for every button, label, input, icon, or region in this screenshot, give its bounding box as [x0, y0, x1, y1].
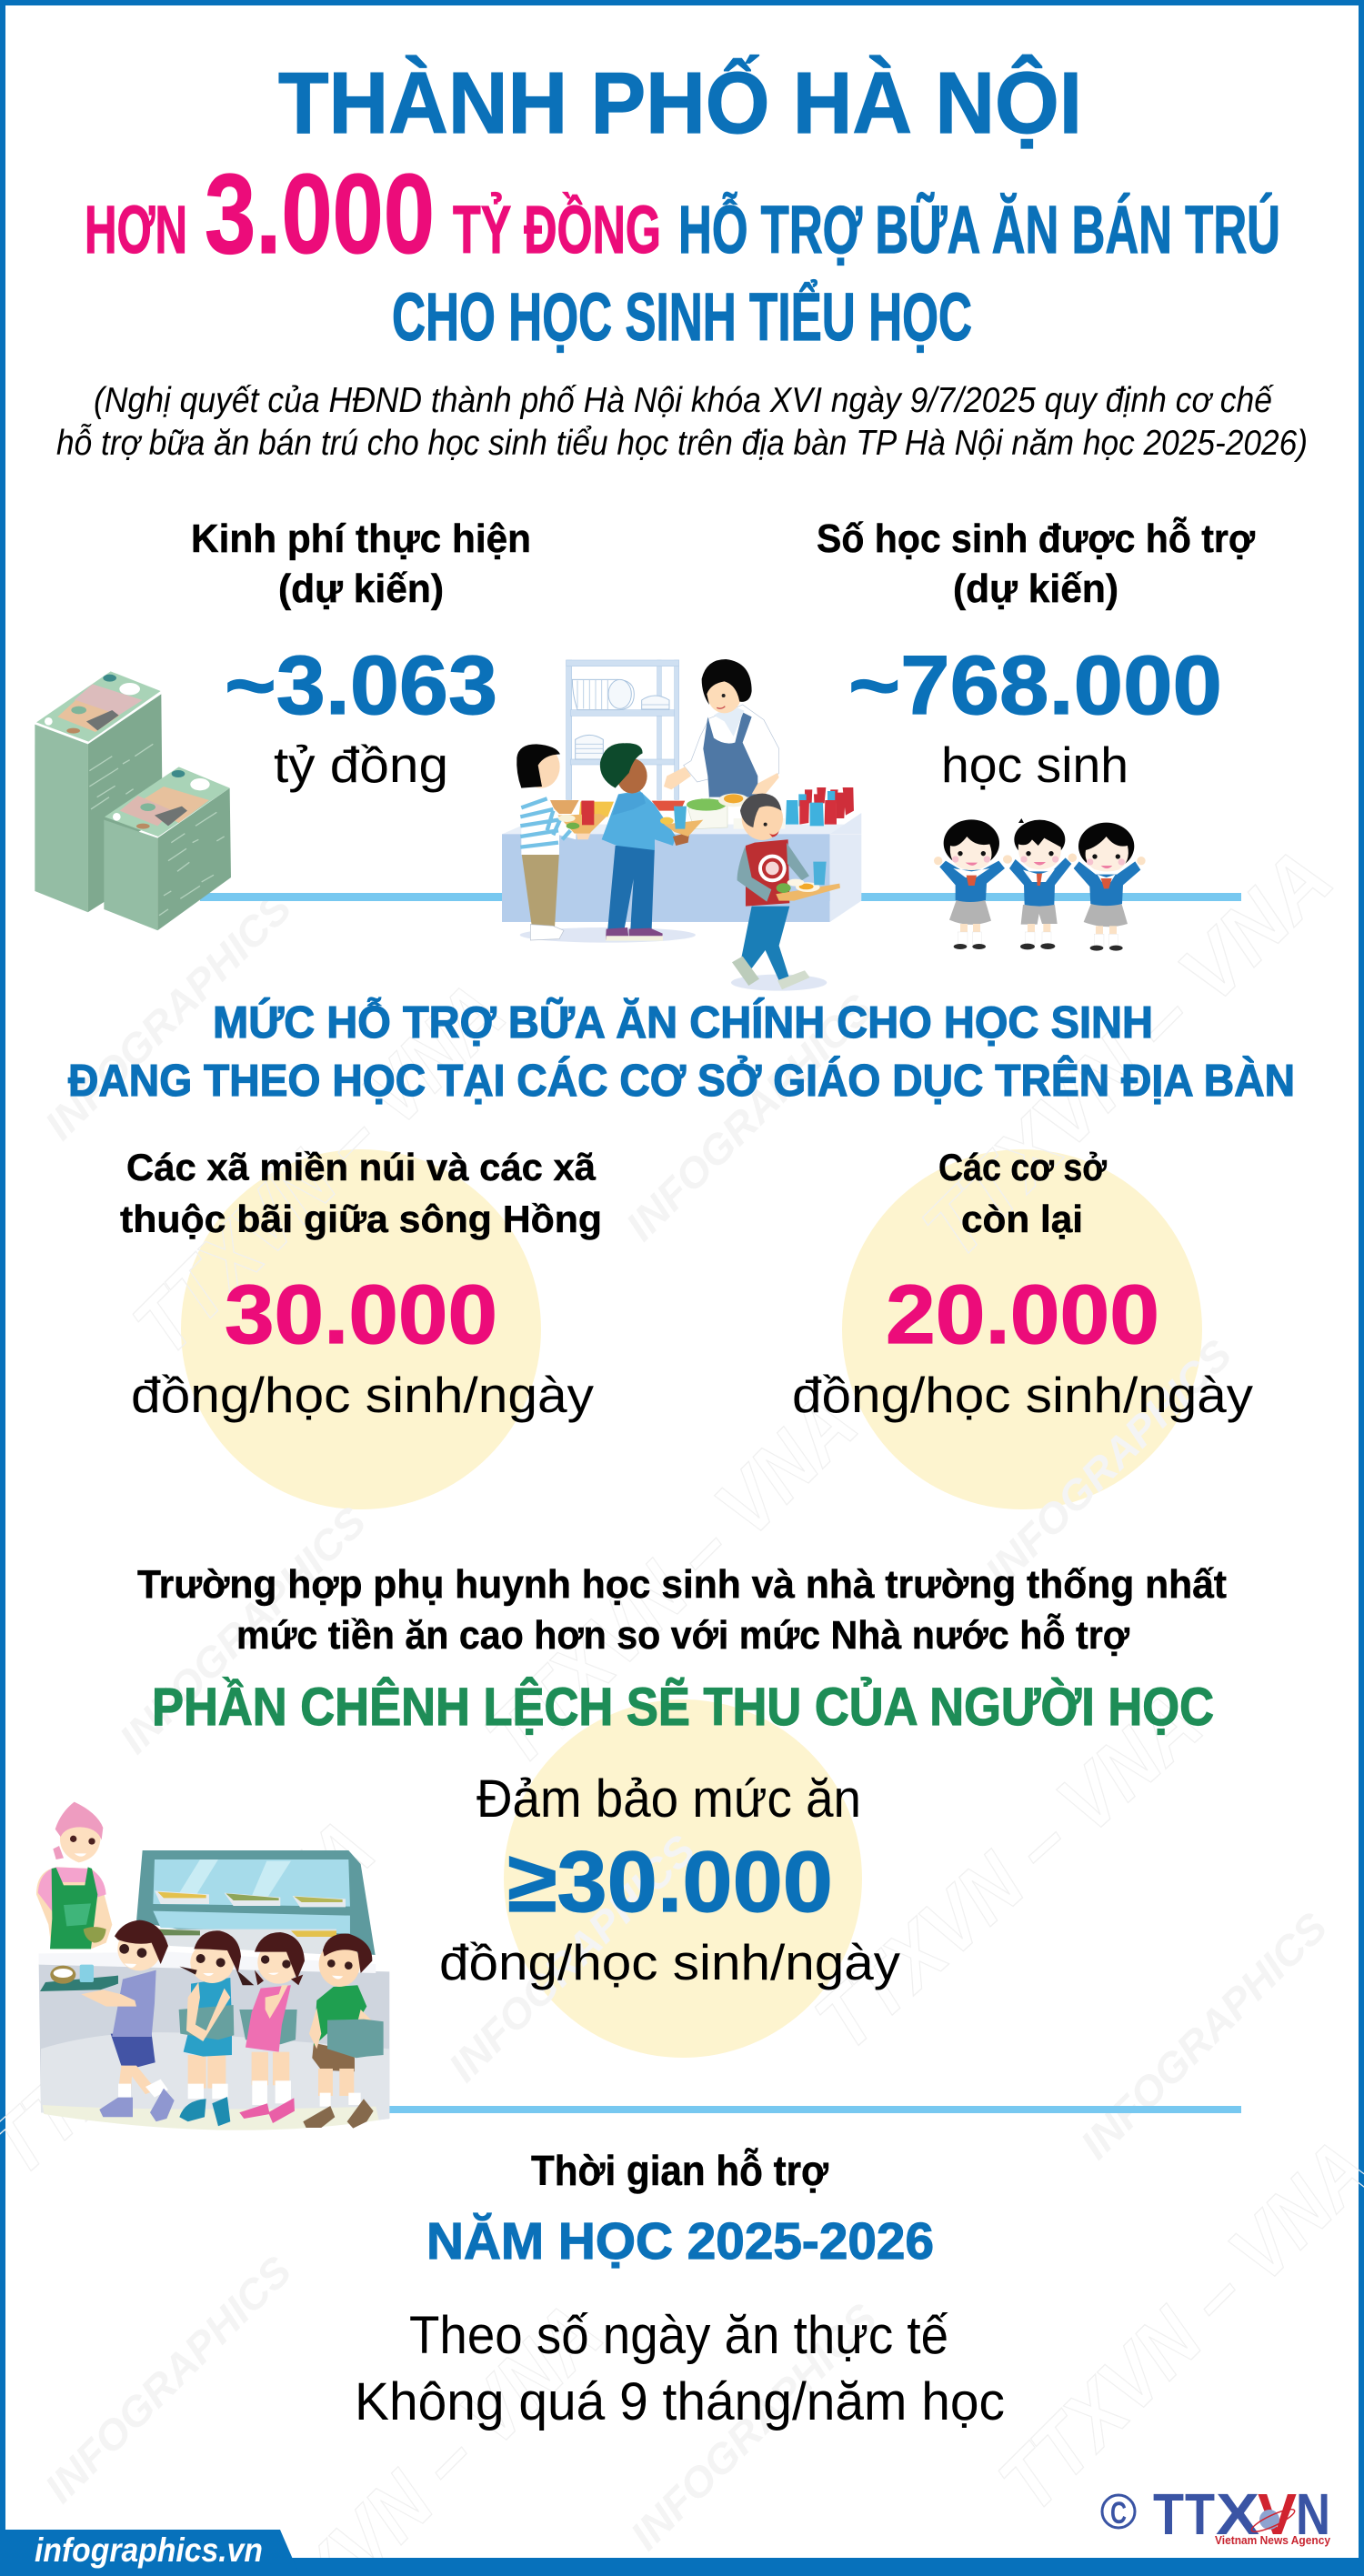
- child in pink: [239, 1932, 305, 2123]
- watermarks: TTXVN – VNA: [798, 1677, 1219, 2068]
- watermarks: INFOGRAPHICS: [1071, 1903, 1337, 2168]
- pupil 1: [934, 819, 1011, 949]
- logo: TTXVN Vietnam News Agency: V: [1258, 2481, 1297, 2547]
- support rate: mountain communes: 30.000: [225, 1268, 497, 1361]
- stat: students: [817, 516, 1256, 793]
- headline line 1: [85, 152, 1280, 277]
- text block: parents agreement: mức tiền ăn cao hơn so với mức Nhà nước hỗ trợ: [236, 1612, 1130, 1658]
- copyright mark: [1102, 2495, 1135, 2531]
- footer tag: site name: [0, 2530, 300, 2576]
- shadows: [520, 927, 827, 991]
- stat: budget: Kinh phí thực hiện: [191, 516, 531, 561]
- support rate: other schools: đồng/học sinh/ngày: [792, 1367, 1254, 1423]
- subtitle note: [56, 381, 1308, 463]
- logo: TTXVN Vietnam News Agency: T: [1185, 2481, 1215, 2547]
- subtitle note: (Nghị quyết của HĐND thành phố Hà Nội khóa XVI ngày 9/7/2025 quy định cơ chế: [94, 381, 1274, 420]
- title: city: THÀNH PHỐ HÀ NỘI: [278, 54, 1082, 152]
- watermarks: INFOGRAPHICS: [35, 884, 301, 1148]
- pupil 3: [1068, 823, 1146, 951]
- stat: students: (dự kiến): [953, 566, 1118, 611]
- divider line: upper: [200, 893, 1241, 901]
- headline line 2: CHO HỌC SINH TIỂU HỌC: [392, 279, 972, 355]
- support rate: mountain communes: thuộc bãi giữa sông Hồng: [120, 1198, 602, 1240]
- child in purple: [81, 1920, 175, 2121]
- green callout heading: PHẦN CHÊNH LỆCH SẼ THU CỦA NGƯỜI HỌC: [152, 1678, 1214, 1737]
- support period: Theo số ngày ăn thực tế: [409, 2306, 948, 2365]
- watermarks: TTXVN – VNA: [116, 967, 523, 1373]
- watermarks: INFOGRAPHICS: [976, 1330, 1241, 1595]
- cups: [786, 787, 854, 826]
- child in blue dress: [179, 1930, 254, 2126]
- circles: yellow backdrops: [181, 1149, 1202, 2058]
- stat: students: ~768.000: [848, 639, 1222, 732]
- watermarks: INFOGRAPHICS: [621, 2294, 887, 2559]
- serving counter: [502, 813, 861, 922]
- illustration: children queuing: [36, 1802, 389, 2130]
- stat: students: Số học sinh được hỗ trợ: [817, 516, 1256, 561]
- counter: [39, 1952, 389, 2130]
- logo: TTXVN Vietnam News Agency: X: [1216, 2481, 1259, 2547]
- tray with bowl: [40, 1965, 118, 1991]
- stat: budget: [191, 516, 531, 793]
- logo: TTXVN Vietnam News Agency: T: [1153, 2481, 1184, 2547]
- icon: money stacks: [35, 671, 231, 930]
- minimum meal value: ≥30.000: [507, 1834, 833, 1930]
- display case: [136, 1850, 376, 1955]
- minimum meal value: đồng/học sinh/ngày: [439, 1934, 901, 1990]
- shelf with plates: [567, 660, 679, 799]
- kid in striped sweater: [517, 744, 607, 940]
- cook: [36, 1802, 112, 1949]
- headline line 1: 3.000: [205, 152, 435, 277]
- kid with tray: [732, 794, 840, 989]
- minimum meal value: [439, 1769, 901, 1990]
- logo: TTXVN Vietnam News Agency: Vietnam News Agency: [1215, 2533, 1331, 2547]
- title block: [85, 54, 1280, 355]
- support rate: mountain communes: [120, 1146, 602, 1423]
- text block: parents agreement: Trường hợp phụ huynh học sinh và nhà trường thống nhất: [137, 1562, 1227, 1607]
- headline line 1: HƠN: [85, 192, 187, 267]
- watermarks: TTXVN – VNA: [905, 831, 1350, 1277]
- minimum meal value: Đảm bảo mức ăn: [476, 1769, 861, 1829]
- support rate: other schools: 20.000: [886, 1268, 1159, 1361]
- section heading: support level: [68, 997, 1295, 1106]
- copyright mark: C: [1110, 2496, 1127, 2531]
- support period: [355, 2147, 1005, 2431]
- watermarks: [0, 831, 1364, 2576]
- support rate: other schools: Các cơ sở: [938, 1146, 1107, 1188]
- logo: TTXVN Vietnam News Agency: N: [1296, 2481, 1330, 2547]
- headline line 1: TỶ ĐỒNG: [453, 192, 661, 267]
- section heading: support level: ĐANG THEO HỌC TẠI CÁC CƠ SỞ GIÁO DỤC TRÊN ĐỊA BÀN: [68, 1056, 1295, 1106]
- kid in blue jacket: [600, 743, 703, 941]
- footer tag: site name: infographics.vn: [35, 2531, 263, 2569]
- support period: Không quá 9 tháng/năm học: [355, 2372, 1005, 2431]
- section heading: support level: MỨC HỖ TRỢ BỮA ĂN CHÍNH CHO HỌC SINH: [213, 997, 1153, 1047]
- support rate: other schools: [792, 1146, 1254, 1423]
- food trays on counter: [550, 794, 785, 829]
- stat: budget: (dự kiến): [278, 566, 444, 611]
- watermarks: INFOGRAPHICS: [35, 2247, 301, 2511]
- support rate: other schools: còn lại: [961, 1198, 1083, 1240]
- illustration: three pupils: [934, 818, 1146, 951]
- illustration: canteen serving scene: [502, 659, 861, 991]
- stat: students: học sinh: [941, 737, 1128, 793]
- support period: NĂM HỌC 2025-2026: [426, 2212, 934, 2270]
- stat: budget: ~3.063: [225, 639, 497, 732]
- support period: Thời gian hỗ trợ: [531, 2147, 828, 2194]
- text block: parents agreement: [137, 1562, 1227, 1658]
- support rate: mountain communes: đồng/học sinh/ngày: [131, 1367, 595, 1423]
- watermarks: TTXVN – VNA: [468, 1378, 875, 1784]
- bottom bar: [0, 2558, 1364, 2576]
- watermarks: INFOGRAPHICS: [439, 1826, 705, 2090]
- watermarks: INFOGRAPHICS: [110, 1498, 376, 1762]
- pupil 2: [1004, 818, 1077, 949]
- divider line: lower: [382, 2106, 1241, 2113]
- watermarks: INFOGRAPHICS: [617, 985, 882, 1249]
- child in green: [303, 1934, 384, 2129]
- support rate: mountain communes: Các xã miền núi và các xã: [126, 1146, 597, 1188]
- logo: TTXVN Vietnam News Agency: [1102, 2481, 1331, 2547]
- teacher: [664, 659, 779, 800]
- stat: budget: tỷ đồng: [274, 737, 448, 793]
